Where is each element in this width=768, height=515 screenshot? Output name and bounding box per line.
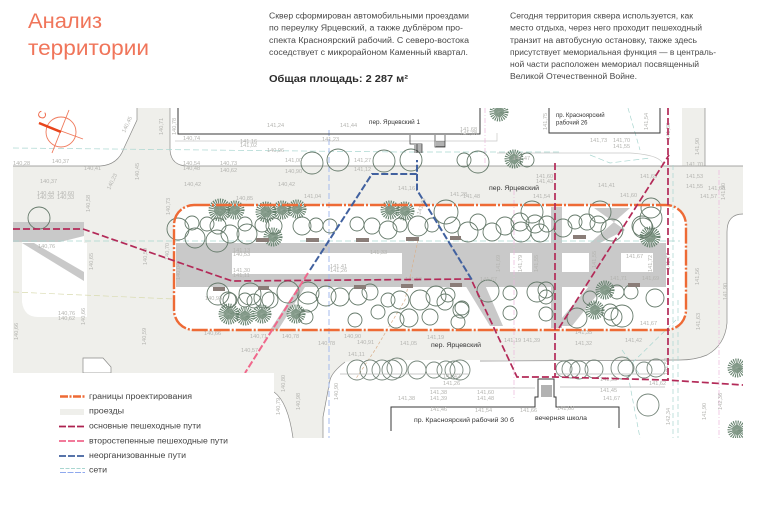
legend: driveways: проезды bbox=[89, 406, 124, 416]
spot heights: 141,90 bbox=[702, 403, 708, 420]
spot heights: 141,46 bbox=[430, 407, 447, 413]
spot heights: 141,04 bbox=[304, 194, 321, 200]
spot heights: 141,35 bbox=[575, 330, 592, 336]
legend: unorganized paths: неорганизованные пути bbox=[89, 451, 186, 460]
spot heights: 141,57 bbox=[700, 194, 717, 200]
title: территории bbox=[28, 36, 149, 60]
square fill bbox=[174, 205, 686, 330]
spot heights: 140,79 bbox=[276, 398, 282, 415]
description text block: Великой Отечественной Войне. bbox=[510, 72, 637, 81]
icon: north compass: С bbox=[36, 109, 50, 121]
spot heights: 141,79 bbox=[518, 255, 524, 272]
spot heights: 140,58 bbox=[86, 195, 92, 212]
spot heights: 141,26 bbox=[443, 381, 460, 387]
spot heights: 141,50 bbox=[405, 277, 422, 283]
spot heights: 141,55 bbox=[613, 144, 630, 150]
description text block: транзит на автобусную остановку, также здесь bbox=[510, 36, 697, 45]
spot heights: 141,67 bbox=[626, 254, 643, 260]
spot heights: 141,44 bbox=[340, 123, 357, 129]
spot heights: 141,90 bbox=[721, 183, 727, 200]
spot heights: 141,13 bbox=[233, 248, 250, 254]
spot heights: 141,90 bbox=[723, 283, 729, 300]
spot heights: 141,30 bbox=[233, 268, 250, 274]
intro text block bbox=[269, 12, 470, 57]
spot heights: 142,34 bbox=[666, 408, 672, 425]
main pedestrian paths bbox=[13, 108, 743, 385]
spot heights: 141,54 bbox=[533, 194, 550, 200]
buildings bbox=[178, 108, 660, 431]
spot heights: 141,56 bbox=[695, 268, 701, 285]
spot heights: 141,27 bbox=[354, 158, 371, 164]
spot heights: 141,48 bbox=[463, 194, 480, 200]
spot heights: 141,90 bbox=[695, 138, 701, 155]
spot heights: 140,44 bbox=[37, 191, 54, 197]
paved band bbox=[176, 207, 666, 330]
spot heights: 141,19 bbox=[427, 335, 444, 341]
spot heights: 140,90 bbox=[285, 169, 302, 175]
roads bbox=[13, 108, 743, 438]
spot heights: 141,60 bbox=[477, 390, 494, 396]
spot heights: 140,71 bbox=[159, 118, 165, 135]
description text block: Сегодня территория сквера используется, как bbox=[510, 12, 694, 20]
spot heights: 140,78 bbox=[172, 118, 178, 135]
legend: project boundary: границы проектирования bbox=[89, 392, 192, 401]
street labels: рабочий 26 bbox=[556, 120, 588, 126]
total area: Общая площадь: 2 287 м² bbox=[269, 73, 409, 85]
spot heights: 140,90 bbox=[334, 383, 340, 400]
spot heights: 141,00 bbox=[285, 158, 302, 164]
street labels: пр. Красноярский bbox=[556, 112, 605, 119]
spot heights: 141,72 bbox=[648, 255, 654, 272]
intro text block: соседствует с микрорайоном Каменный квартал. bbox=[269, 48, 468, 57]
spot heights: 140,35 bbox=[37, 195, 54, 201]
spot heights: 140,42 bbox=[278, 182, 295, 188]
spot heights: 140,42 bbox=[184, 182, 201, 188]
description text block: присутствует мемориальная функция — в централь- bbox=[510, 48, 716, 57]
spot heights: 140,73 bbox=[220, 161, 237, 167]
spot heights: 141,75 bbox=[543, 113, 549, 130]
project boundary bbox=[174, 205, 686, 330]
spot heights: 141,49 bbox=[416, 198, 428, 216]
spot heights: 140,91 bbox=[357, 340, 374, 346]
spot heights: 141,77 bbox=[666, 253, 672, 270]
small building plot at lower left bbox=[83, 358, 111, 373]
description text block: место отдыха, через него проходит пешеходный bbox=[510, 24, 702, 32]
spot heights: 140,45 bbox=[135, 163, 141, 180]
spot heights: 141,41 bbox=[330, 264, 347, 270]
spot heights: 141,71 bbox=[610, 276, 627, 282]
spot heights: 141,69 bbox=[496, 255, 502, 272]
spot heights: 141,02 bbox=[240, 143, 257, 149]
spot heights: 140,37 bbox=[40, 179, 57, 185]
left island paving bbox=[13, 222, 84, 281]
icon: north compass bbox=[36, 109, 83, 153]
title bbox=[28, 9, 149, 60]
spot heights: 141,59 bbox=[600, 377, 617, 383]
spot heights: 141,47 bbox=[513, 156, 530, 162]
spot heights: 141,42 bbox=[625, 338, 642, 344]
spot heights: 141,11 bbox=[233, 273, 250, 279]
spot heights: 141,55 bbox=[592, 251, 598, 268]
site plan map bbox=[13, 107, 743, 438]
spot heights: 141,78 bbox=[460, 131, 477, 137]
intro text block: по переулку Ярцевский, а также дублёром про- bbox=[269, 24, 463, 32]
spot heights: 141,53 bbox=[686, 174, 703, 180]
lawn islands bbox=[232, 253, 653, 274]
spot heights: 141,12 bbox=[354, 167, 371, 173]
spot heights: 140,65 bbox=[89, 253, 95, 270]
spot heights: 141,45 bbox=[600, 388, 617, 394]
legend: project boundary bbox=[60, 392, 192, 401]
spot heights: 140,93 bbox=[205, 296, 222, 302]
spot heights: 141,24 bbox=[267, 123, 284, 129]
spot heights: 141,60 bbox=[536, 174, 553, 180]
spot heights: 141,43 bbox=[536, 179, 553, 185]
street labels: пер. Ярцевский bbox=[489, 185, 539, 192]
spot heights: 141,33 bbox=[370, 250, 387, 256]
spot heights: 140,76 bbox=[58, 311, 75, 317]
spot heights: 141,39 bbox=[523, 338, 540, 344]
description text block: ной части расположен мемориал посвященный bbox=[510, 60, 699, 69]
utility lines bbox=[13, 108, 719, 438]
description text block bbox=[510, 12, 716, 81]
street labels: пер. Ярцевский 1 bbox=[369, 119, 421, 126]
spot heights: 141,70 bbox=[686, 162, 703, 168]
spot heights: 141,28 bbox=[450, 192, 467, 198]
spot heights: 140,98 bbox=[296, 393, 302, 410]
spot heights: 142,36 bbox=[718, 393, 724, 410]
textured trees bbox=[214, 107, 742, 435]
spot heights: 140,62 bbox=[58, 316, 75, 322]
legend: main pedestrian paths: основные пешеходные пути bbox=[89, 422, 201, 430]
title: Анализ bbox=[28, 9, 102, 33]
spot heights: 141,54 bbox=[475, 408, 492, 414]
spot heights: 140,71 bbox=[250, 334, 267, 340]
spot heights: 141,55 bbox=[686, 184, 703, 190]
spot heights: 141,48 bbox=[477, 396, 494, 402]
spot heights: 140,57 bbox=[241, 348, 258, 354]
spot heights: 141,68 bbox=[708, 186, 725, 192]
spot heights: 141,73 bbox=[590, 138, 607, 144]
spot heights: 141,66 bbox=[520, 408, 537, 414]
spot heights: 140,66 bbox=[204, 331, 221, 337]
spot heights: 140,04 bbox=[176, 263, 182, 280]
spot heights: 141,05 bbox=[400, 341, 417, 347]
legend: networks: сети bbox=[89, 466, 107, 474]
street labels bbox=[369, 112, 605, 424]
spot heights: 141,62 bbox=[649, 381, 666, 387]
spot heights: 140,74 bbox=[183, 136, 200, 142]
spot heights: 140,33 bbox=[57, 195, 74, 201]
spot heights bbox=[13, 113, 729, 425]
spot heights: 141,67 bbox=[640, 321, 657, 327]
spot heights: 141,54 bbox=[644, 113, 650, 130]
spot heights: 141,70 bbox=[613, 138, 630, 144]
legend: unorganized paths bbox=[59, 451, 186, 460]
spot heights: 140,85 bbox=[236, 196, 253, 202]
spot heights: 140,73 bbox=[166, 198, 172, 215]
spot heights: 140,66 bbox=[81, 308, 87, 325]
spot heights: 141,67 bbox=[603, 396, 620, 402]
spot heights: 141,67 bbox=[480, 277, 497, 283]
unorganized paths bbox=[310, 160, 472, 280]
outlined trees bbox=[28, 149, 664, 329]
street labels: пр. Красноярский рабочий 30 б bbox=[414, 417, 515, 424]
spot heights: 141,23 bbox=[322, 137, 339, 143]
spot heights: 141,16 bbox=[398, 186, 415, 192]
spot heights: 140,23 bbox=[106, 173, 119, 191]
legend: networks bbox=[60, 466, 107, 474]
spot heights: 140,62 bbox=[220, 168, 237, 174]
street trees lower row bbox=[347, 357, 665, 416]
spot heights: 141,39 bbox=[430, 396, 447, 402]
secondary pedestrian path bbox=[245, 273, 308, 373]
spot heights: 141,54 bbox=[664, 358, 670, 375]
spot heights: 140,96 bbox=[267, 148, 284, 154]
spot heights: 140,70 bbox=[165, 243, 171, 260]
spot heights: 140,78 bbox=[318, 341, 335, 347]
spot heights: 140,54 bbox=[183, 161, 200, 167]
spot heights: 141,42 bbox=[443, 374, 460, 380]
street labels: пер. Ярцевский bbox=[431, 342, 481, 349]
curb lines bbox=[13, 108, 743, 438]
spot heights: 140,60 bbox=[57, 191, 74, 197]
legend: driveways bbox=[60, 406, 124, 416]
spot heights: 140,41 bbox=[84, 166, 101, 172]
street labels: вечерняя школа bbox=[535, 416, 588, 422]
spot heights: 140,76 bbox=[38, 244, 55, 250]
legend background bbox=[13, 373, 274, 515]
spot heights: 141,55 bbox=[534, 255, 540, 272]
spot heights: 140,90 bbox=[344, 334, 361, 340]
spot heights: 140,28 bbox=[13, 161, 30, 167]
spot heights: 140,59 bbox=[142, 328, 148, 345]
stairs bbox=[410, 135, 552, 396]
legend bbox=[59, 392, 228, 474]
white upper thin lines bbox=[170, 133, 663, 165]
spot heights: 140,53 bbox=[233, 252, 250, 258]
spot heights: 141,38 bbox=[398, 396, 415, 402]
spot heights: 140,78 bbox=[282, 334, 299, 340]
sidewalk under trees bbox=[340, 374, 665, 388]
benches bbox=[213, 235, 640, 291]
spot heights: 140,45 bbox=[121, 116, 134, 134]
legend: secondary pedestrian paths: второстепенные пешеходные пути bbox=[89, 436, 228, 446]
spot heights: 141,38 bbox=[666, 123, 672, 140]
road at upper right bbox=[682, 108, 705, 166]
spot heights: 140,48 bbox=[183, 166, 200, 172]
spot heights: 141,32 bbox=[575, 341, 592, 347]
spot heights: 140,37 bbox=[52, 159, 69, 165]
spot heights: 140,66 bbox=[14, 323, 20, 340]
spot heights: 141,38 bbox=[430, 390, 447, 396]
intro text block: спекта Красноярский рабочий. С северо-востока bbox=[269, 36, 470, 45]
spot heights: 141,11 bbox=[348, 352, 365, 358]
spot heights: 141,19 bbox=[504, 338, 521, 344]
spot heights: 141,69 bbox=[642, 276, 659, 282]
spot heights: 141,16 bbox=[240, 139, 257, 145]
spot heights: 141,69 bbox=[640, 174, 657, 180]
intro text block: Сквер сформирован автомобильными проездами bbox=[269, 12, 469, 20]
spot heights: 141,26 bbox=[330, 268, 347, 274]
left island bbox=[22, 236, 87, 317]
spot heights: 140,80 bbox=[281, 375, 287, 392]
spot heights: 141,60 bbox=[557, 406, 574, 412]
spot heights: 140,59 bbox=[143, 248, 149, 265]
spot heights: 141,63 bbox=[696, 313, 702, 330]
spot heights: 141,60 bbox=[620, 193, 637, 199]
spot heights: 141,68 bbox=[460, 127, 477, 133]
spot heights: 141,41 bbox=[598, 183, 615, 189]
